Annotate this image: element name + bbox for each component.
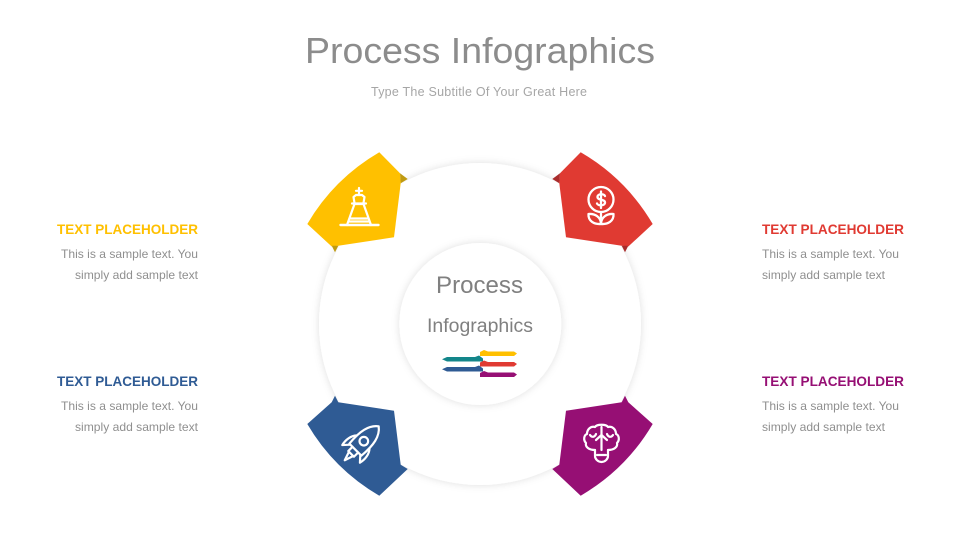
icon: ribbons bbox=[442, 350, 517, 377]
text block: purple: This is a sample text. You bbox=[762, 399, 899, 413]
text block: purple bbox=[762, 373, 904, 434]
text block: red: This is a sample text. You bbox=[762, 247, 899, 261]
text block: purple: TEXT PLACEHOLDER bbox=[762, 373, 904, 389]
text block: blue: simply add sample text bbox=[75, 420, 199, 434]
title: Process Infographics bbox=[305, 30, 655, 71]
panel: red segment bbox=[552, 152, 653, 252]
icon: money flower bbox=[588, 187, 614, 224]
text block: purple: simply add sample text bbox=[762, 420, 886, 434]
icon: chess king bbox=[340, 188, 378, 225]
panel: blue segment bbox=[307, 396, 408, 496]
inner circle bbox=[399, 243, 561, 405]
icon: brain bulb bbox=[584, 425, 619, 462]
text block: yellow bbox=[57, 221, 199, 282]
text block: yellow: simply add sample text bbox=[75, 268, 199, 282]
text block: red: simply add sample text bbox=[762, 268, 886, 282]
panel: yellow segment bbox=[307, 152, 408, 252]
text block: yellow: This is a sample text. You bbox=[61, 247, 198, 261]
text block: blue: This is a sample text. You bbox=[61, 399, 198, 413]
text block: blue: TEXT PLACEHOLDER bbox=[57, 373, 198, 389]
center heading: Infographics: Infographics bbox=[427, 316, 533, 337]
text block: red bbox=[762, 221, 904, 282]
subtitle: Type The Subtitle Of Your Great Here bbox=[371, 85, 587, 99]
center heading: Process: Process bbox=[436, 272, 523, 299]
outer ring bbox=[319, 163, 641, 485]
panel: purple segment bbox=[552, 396, 653, 496]
icon: rocket bbox=[335, 417, 388, 470]
text block: blue bbox=[57, 373, 199, 434]
text block: yellow: TEXT PLACEHOLDER bbox=[57, 221, 198, 237]
text block: red: TEXT PLACEHOLDER bbox=[762, 221, 904, 237]
